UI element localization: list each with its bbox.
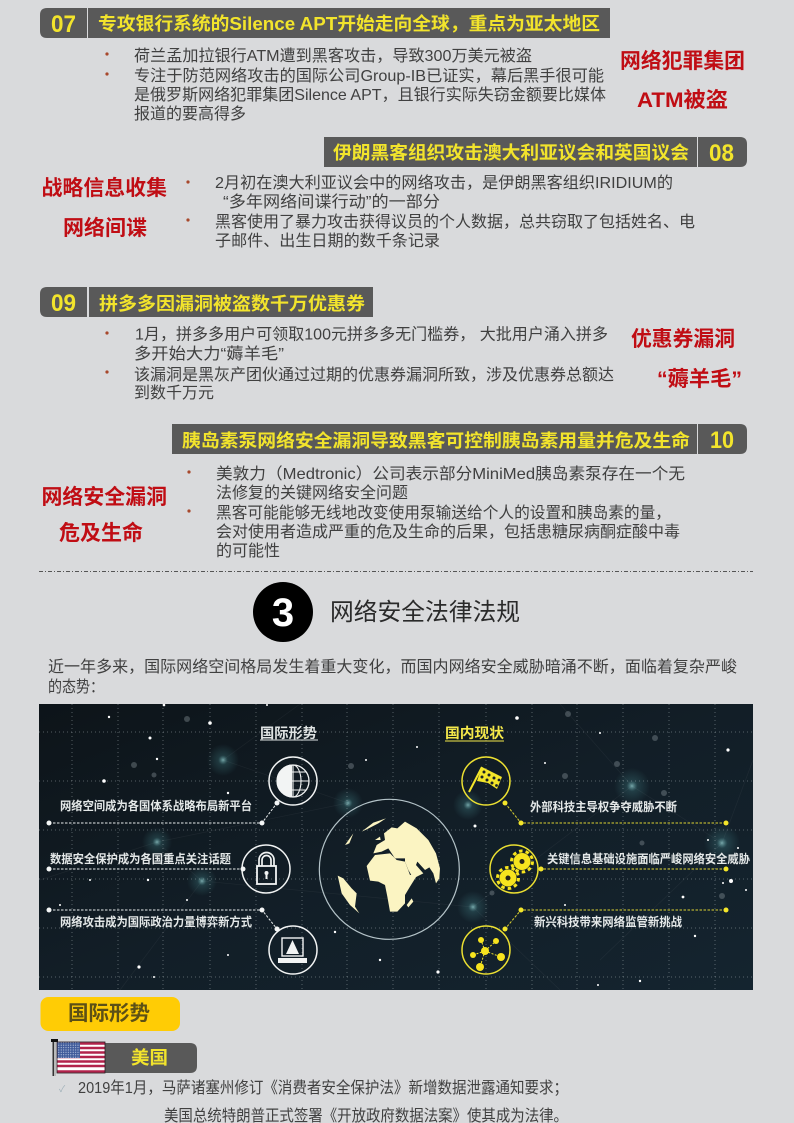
left connectors — [46, 800, 280, 932]
body text 07: 报道的要高得多 — [134, 105, 246, 123]
body text 07: 是俄罗斯网络犯罪集团Silence APT，且银行实际失窃金额要比媒体 — [134, 85, 606, 104]
country bar: USA — [105, 1043, 197, 1073]
body text 09 — [105, 326, 614, 402]
icon: gears — [490, 845, 538, 893]
body text 10: 黑客可能能够无线地改变使用泵输送给个人的设置和胰岛素的量， — [216, 504, 671, 522]
heading bar 08: 伊朗黑客组织攻击澳大利亚议会和英国议会 — [333, 142, 689, 163]
heading: international situation: 国际形势 — [260, 725, 317, 741]
icon: network — [462, 926, 510, 974]
body text 07 — [105, 47, 606, 123]
heading bar 08 — [324, 137, 747, 167]
country bar: USA: 美国 — [131, 1047, 168, 1068]
body text 08: “多年网络间谍行动”的一部分 — [223, 192, 440, 211]
body text 07: 专注于防范网络攻击的国际公司Group-IB已证实，幕后黑手很可能 — [134, 66, 604, 85]
diagram labels: domestic: 关键信息基础设施面临严峻网络安全威胁 — [547, 851, 750, 866]
heading bar 09: 09 — [51, 290, 76, 317]
panel: item 10 — [42, 424, 747, 560]
section heading 3: 3 — [272, 591, 294, 635]
intro text — [48, 657, 737, 696]
body text 08: 子邮件、出生日期的数千条记录 — [215, 232, 440, 250]
body text 10: 的可能性 — [216, 542, 280, 560]
right connectors — [502, 800, 728, 932]
red tags 08: 战略信息收集 — [42, 176, 167, 200]
heading bar 07: 专攻银行系统的Silence APT开始走向全球，重点为亚太地区 — [98, 13, 600, 34]
body text 08 — [186, 173, 695, 250]
red tags 09: “薅羊毛” — [657, 368, 742, 391]
body text 10: 会对使用者造成严重的危及生命的后果，包括患糖尿病酮症酸中毒 — [216, 523, 680, 541]
body text 09: 到数千万元 — [134, 384, 214, 402]
body text: USA: ✓ — [59, 1084, 66, 1094]
yellow button: international situation — [40, 997, 180, 1031]
red tags 07 — [620, 49, 745, 112]
diagram labels: international — [50, 798, 252, 929]
diagram labels: domestic — [530, 799, 750, 929]
panel: item 08 — [42, 137, 747, 250]
icon: flag — [462, 757, 510, 805]
body text 09: 多开始大力“薅羊毛” — [134, 345, 284, 363]
icon: US flag — [51, 1039, 105, 1076]
body text 10 — [187, 465, 685, 560]
body text 09: 1月，拼多多用户可领取100元拼多多无门槛券， 大批用户涌入拼多 — [135, 326, 608, 344]
red tags 10 — [42, 485, 167, 545]
icon: lock — [242, 845, 290, 893]
heading bar 08: 08 — [709, 140, 734, 167]
body text 09: 该漏洞是黑灰产团伙通过过期的优惠券漏洞所致，涉及优惠券总额达 — [134, 366, 614, 384]
icon: globe — [269, 757, 317, 805]
globe — [319, 799, 459, 939]
heading bar 09 — [40, 287, 373, 317]
heading bar 07 — [40, 8, 610, 38]
body text 10: 法修复的关键网络安全问题 — [216, 483, 408, 502]
body text 07: 荷兰孟加拉银行ATM遭到黑客攻击，导致300万美元被盗 — [134, 47, 532, 65]
body text: USA: 2019年1月，马萨诸塞州修订《消费者安全保护法》新增数据泄露通知要求； — [78, 1079, 568, 1097]
diagram labels: international: 网络空间成为各国体系战略布局新平台 — [60, 798, 252, 813]
panel: item 09 — [40, 287, 742, 402]
intro text: 近一年多来，国际网络空间格局发生着重大变化，而国内网络安全威胁暗涌不断，面临着复杂严峻 — [48, 657, 737, 676]
red tags 09: 优惠券漏洞 — [631, 328, 735, 351]
icon: laptop — [269, 926, 317, 974]
diagram labels: domestic: 外部科技主导权争夺威胁不断 — [530, 799, 677, 814]
heading bar 09: 拼多多因漏洞被盗数千万优惠券 — [99, 293, 365, 314]
heading bar 10: 10 — [710, 427, 734, 454]
red tags 07: 网络犯罪集团 — [620, 49, 745, 73]
diagram labels: international: 网络攻击成为国际政治力量博弈新方式 — [60, 914, 252, 929]
body text: USA — [59, 1079, 568, 1123]
body text 08: 2月初在澳大利亚议会中的网络攻击，是伊朗黑客组织IRIDIUM的 — [215, 173, 673, 192]
red tags 08: 网络间谍 — [63, 216, 147, 240]
heading bar 07: 07 — [51, 11, 76, 38]
red tags 09 — [631, 328, 742, 391]
panel: situation diagram — [39, 704, 753, 990]
heading bar 10 — [172, 424, 747, 454]
diagram labels: domestic: 新兴科技带来网络监管新挑战 — [534, 914, 682, 929]
section heading 3 — [253, 582, 520, 642]
panel: item 07 — [40, 8, 745, 123]
red tags 08 — [42, 176, 167, 240]
heading bar 10: 胰岛素泵网络安全漏洞导致黑客可控制胰岛素用量并危及生命 — [182, 430, 690, 451]
body text 10: 美敦力（Medtronic）公司表示部分MiniMed胰岛素泵存在一个无 — [216, 465, 685, 483]
red tags 10: 网络安全漏洞 — [42, 485, 167, 509]
section heading 3: 网络安全法律法规 — [330, 599, 520, 626]
body text 08: 黑客使用了暴力攻击获得议员的个人数据，总共窃取了包括姓名、电 — [215, 213, 695, 231]
intro text: 的态势： — [48, 678, 104, 696]
diagram labels: international: 数据安全保护成为各国重点关注话题 — [50, 851, 231, 866]
red tags 07: ATM被盗 — [637, 89, 728, 112]
red tags 10: 危及生命 — [59, 521, 143, 545]
heading: domestic situation: 国内现状 — [445, 725, 504, 741]
yellow button: international situation: 国际形势 — [68, 1002, 150, 1025]
